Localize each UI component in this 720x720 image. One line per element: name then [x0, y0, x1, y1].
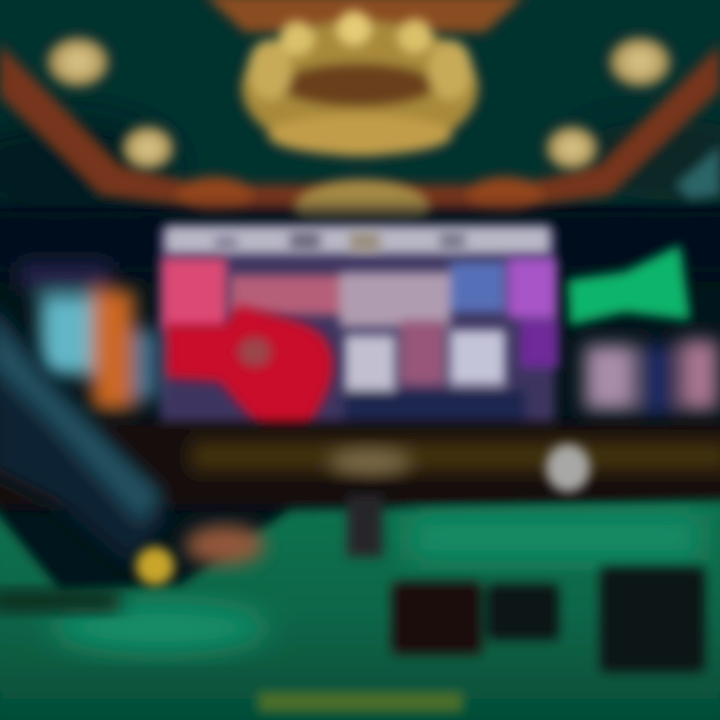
- right screens: lower panels: [585, 340, 718, 415]
- dark chip stacks on table: [392, 567, 705, 672]
- counter: white ornament: [546, 444, 590, 492]
- arm: teal sleeve: [0, 310, 165, 525]
- chip: yellow: [136, 547, 174, 585]
- left screens: teal and orange: [20, 262, 158, 410]
- ceiling: right highlight: [675, 145, 720, 200]
- screens: red heart: [165, 305, 333, 452]
- table: bright strip: [410, 515, 700, 560]
- counter: central glow: [328, 448, 412, 476]
- chip: dark stack: [347, 495, 383, 557]
- ceiling: round lights: [47, 37, 671, 236]
- dark counter under screens: [0, 422, 720, 507]
- wall of screens: [20, 226, 718, 452]
- table: bright pool: [50, 604, 270, 652]
- dark band behind screens: [0, 212, 720, 272]
- hand and chips: [136, 495, 383, 585]
- screens: base: [160, 228, 555, 433]
- screens: pink panel: [162, 258, 227, 330]
- green table: [0, 500, 720, 720]
- ceiling: [0, 0, 720, 236]
- table: dark band: [0, 590, 120, 612]
- counter: wooden bar: [190, 440, 720, 472]
- right screens: green bow: [568, 245, 690, 325]
- table: gold lettering glow: [258, 692, 463, 712]
- screens: center panels: [230, 258, 558, 430]
- dark diagonal arm on left: [0, 300, 170, 565]
- screens: white top strip: [165, 226, 550, 254]
- ceiling: central chandelier: [242, 11, 478, 156]
- screens: strip shading: [215, 232, 465, 252]
- ceiling: wooden beams: [0, 0, 720, 213]
